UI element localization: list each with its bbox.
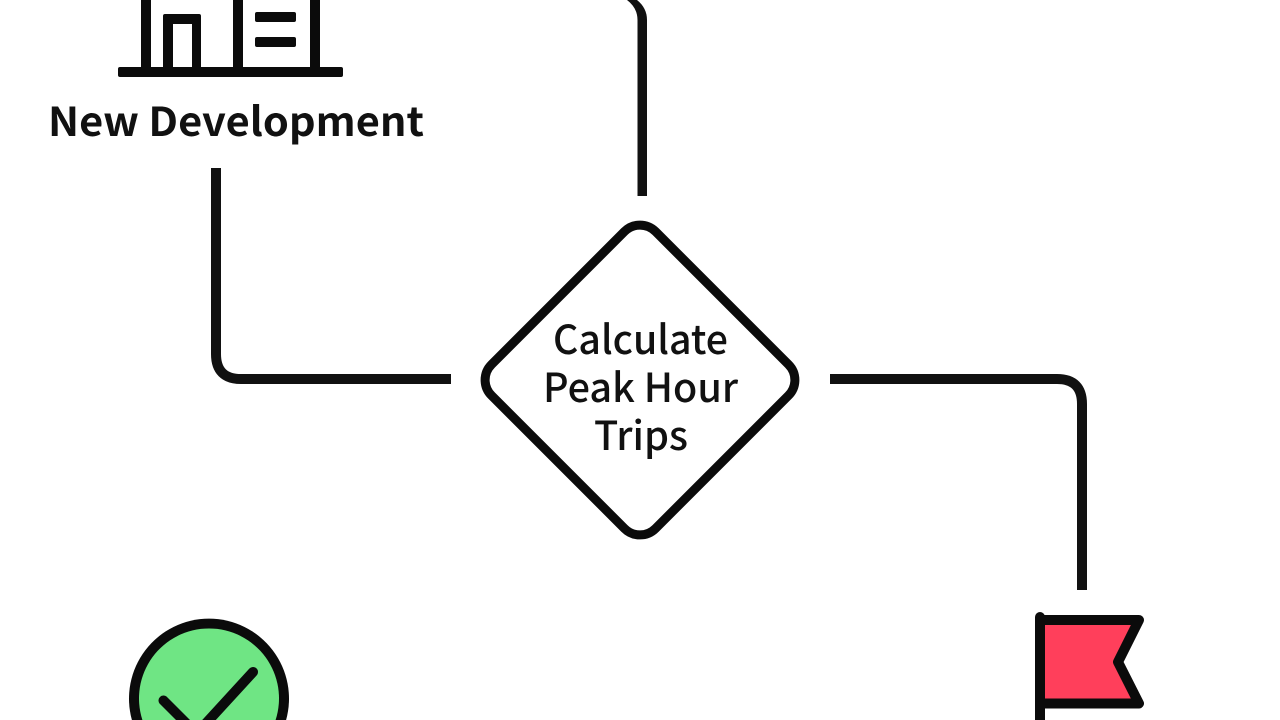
diamond text: Trips — [594, 404, 688, 462]
connector: building to diamond — [216, 168, 451, 379]
connector: diamond to flag — [830, 379, 1082, 590]
diamond text — [543, 308, 739, 462]
decision diamond — [485, 225, 795, 535]
diamond text: Peak Hour — [543, 356, 739, 414]
connector: diamond upward — [627, 0, 647, 196]
diamond outline — [485, 225, 795, 535]
icon: building — [118, 0, 343, 77]
icon: green check circle — [129, 619, 289, 720]
label: New Development: New Development — [48, 90, 424, 148]
icon: red flag — [1035, 612, 1139, 720]
diamond text: Calculate — [553, 308, 728, 366]
